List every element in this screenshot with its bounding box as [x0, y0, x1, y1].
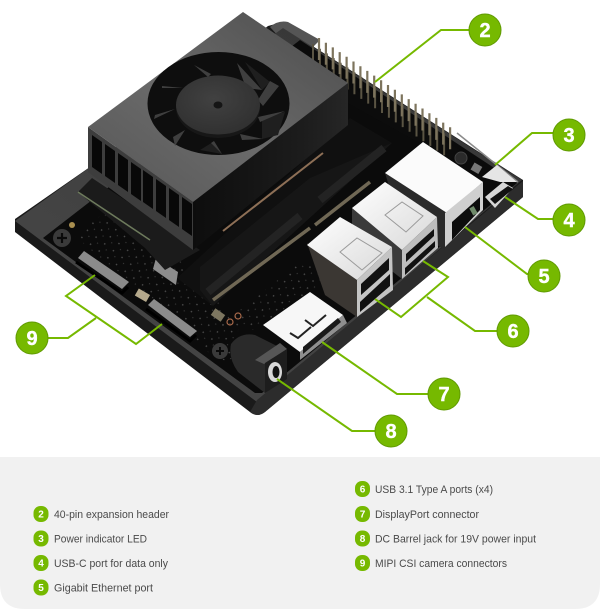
- rear bracket: [270, 22, 320, 60]
- white reflection near LED: [482, 165, 517, 182]
- legend item 6: 6: [360, 484, 366, 496]
- callout 2: 40-pin expansion header: 2: [479, 20, 491, 42]
- heatsink side face: [193, 83, 348, 250]
- memory socket: [177, 118, 392, 306]
- legend item 7: DisplayPort connector: [375, 509, 479, 521]
- screw: top left: [53, 229, 71, 247]
- circuit board component texture: [75, 200, 265, 370]
- camera connector 2: [146, 299, 197, 341]
- latch: [153, 258, 178, 285]
- callout 4: USB-C port: [505, 197, 585, 236]
- callout 9: camera connectors: [16, 275, 162, 354]
- front plate edge: [250, 181, 523, 415]
- legend item 8: [355, 530, 536, 546]
- plate top surface: [15, 28, 522, 402]
- copper pads: [227, 313, 241, 325]
- legend item 9: 9: [360, 558, 366, 570]
- heatsink top face: [88, 12, 348, 202]
- legend item 2: 40-pin expansion header: [54, 509, 169, 521]
- crystal 2: [211, 308, 225, 322]
- status pad: [69, 222, 75, 228]
- legend background: [0, 457, 600, 609]
- callout 3: power indicator LED: [495, 119, 585, 165]
- USB-C port: [485, 182, 513, 208]
- circuit board component texture: [215, 262, 340, 330]
- module board green edge: [78, 192, 150, 240]
- fan blades: [154, 63, 285, 154]
- callout 6: USB ports: [375, 261, 529, 347]
- camera connector 1: [76, 251, 129, 293]
- legend item 5: 5: [38, 583, 44, 594]
- callout 4: USB-C port: 4: [563, 210, 575, 232]
- fan wide blades: [200, 62, 285, 154]
- legend item 7: [355, 506, 479, 522]
- callout 5: Ethernet port: [465, 227, 560, 292]
- heatsink: [88, 12, 348, 250]
- legend item 3: [34, 530, 147, 546]
- fan opening: [148, 52, 290, 155]
- 40-pin header pins: [319, 38, 450, 149]
- callout 2: 40-pin expansion header: [375, 14, 501, 82]
- callout 8: DC barrel jack: 8: [385, 421, 397, 443]
- black circuit board: [43, 40, 517, 393]
- legend panel: [0, 457, 600, 609]
- legend item 6: USB 3.1 Type A ports (x4): [375, 484, 493, 496]
- legend item 6: [355, 481, 493, 497]
- callout 9: camera connectors: 9: [26, 328, 38, 350]
- legend item 9: MIPI CSI camera connectors: [375, 558, 507, 570]
- power LED: [471, 163, 482, 174]
- legend item 4: [34, 555, 168, 571]
- legend item 3: 3: [38, 534, 44, 545]
- legend item 7: 7: [360, 510, 366, 520]
- 40-pin header base: [335, 84, 460, 160]
- Ethernet port: [385, 142, 483, 250]
- legend item 5: [34, 580, 153, 596]
- callout 3: power indicator LED: 3: [563, 125, 575, 147]
- callout 7: DisplayPort: [322, 342, 460, 410]
- legend item 5: Gigabit Ethernet port: [54, 582, 153, 594]
- callout 6: USB ports: 6: [507, 321, 519, 343]
- 40-pin header pins, rear row: [313, 44, 444, 155]
- callout 5: Ethernet port: 5: [538, 266, 550, 288]
- crystal: [135, 289, 150, 302]
- heatsink fin slots: [92, 135, 192, 236]
- callout 8: DC barrel jack: [277, 379, 407, 447]
- heatsink front with fins: [88, 127, 193, 250]
- module circuit board under heatsink: [78, 178, 200, 270]
- fan hub: [176, 76, 260, 134]
- legend item 4: 4: [38, 558, 44, 570]
- fan: [148, 52, 290, 155]
- callout 7: DisplayPort: 7: [438, 384, 450, 406]
- USB ports, upper stack: [352, 182, 438, 279]
- base plate underside: [15, 22, 523, 415]
- screw: bottom: [212, 343, 228, 359]
- legend item 2: 2: [38, 510, 44, 520]
- mounting hole: [455, 152, 467, 164]
- DisplayPort connector: [263, 292, 347, 360]
- legend item 9: [355, 555, 507, 571]
- USB ports, lower stack: [307, 217, 393, 317]
- legend item 4: USB-C port for data only: [54, 558, 168, 570]
- legend item 2: [34, 506, 169, 522]
- rim highlight: [457, 133, 518, 182]
- product photo: carrier board: [15, 12, 523, 415]
- fan hub center: [214, 102, 222, 108]
- fan hub shadow: [176, 78, 260, 138]
- legend item 8: DC Barrel jack for 19V power input: [375, 534, 536, 546]
- legend item 8: 8: [360, 534, 366, 545]
- legend item 3: Power indicator LED: [54, 534, 147, 546]
- module copper edge: [223, 153, 323, 231]
- DC barrel jack: [230, 334, 287, 393]
